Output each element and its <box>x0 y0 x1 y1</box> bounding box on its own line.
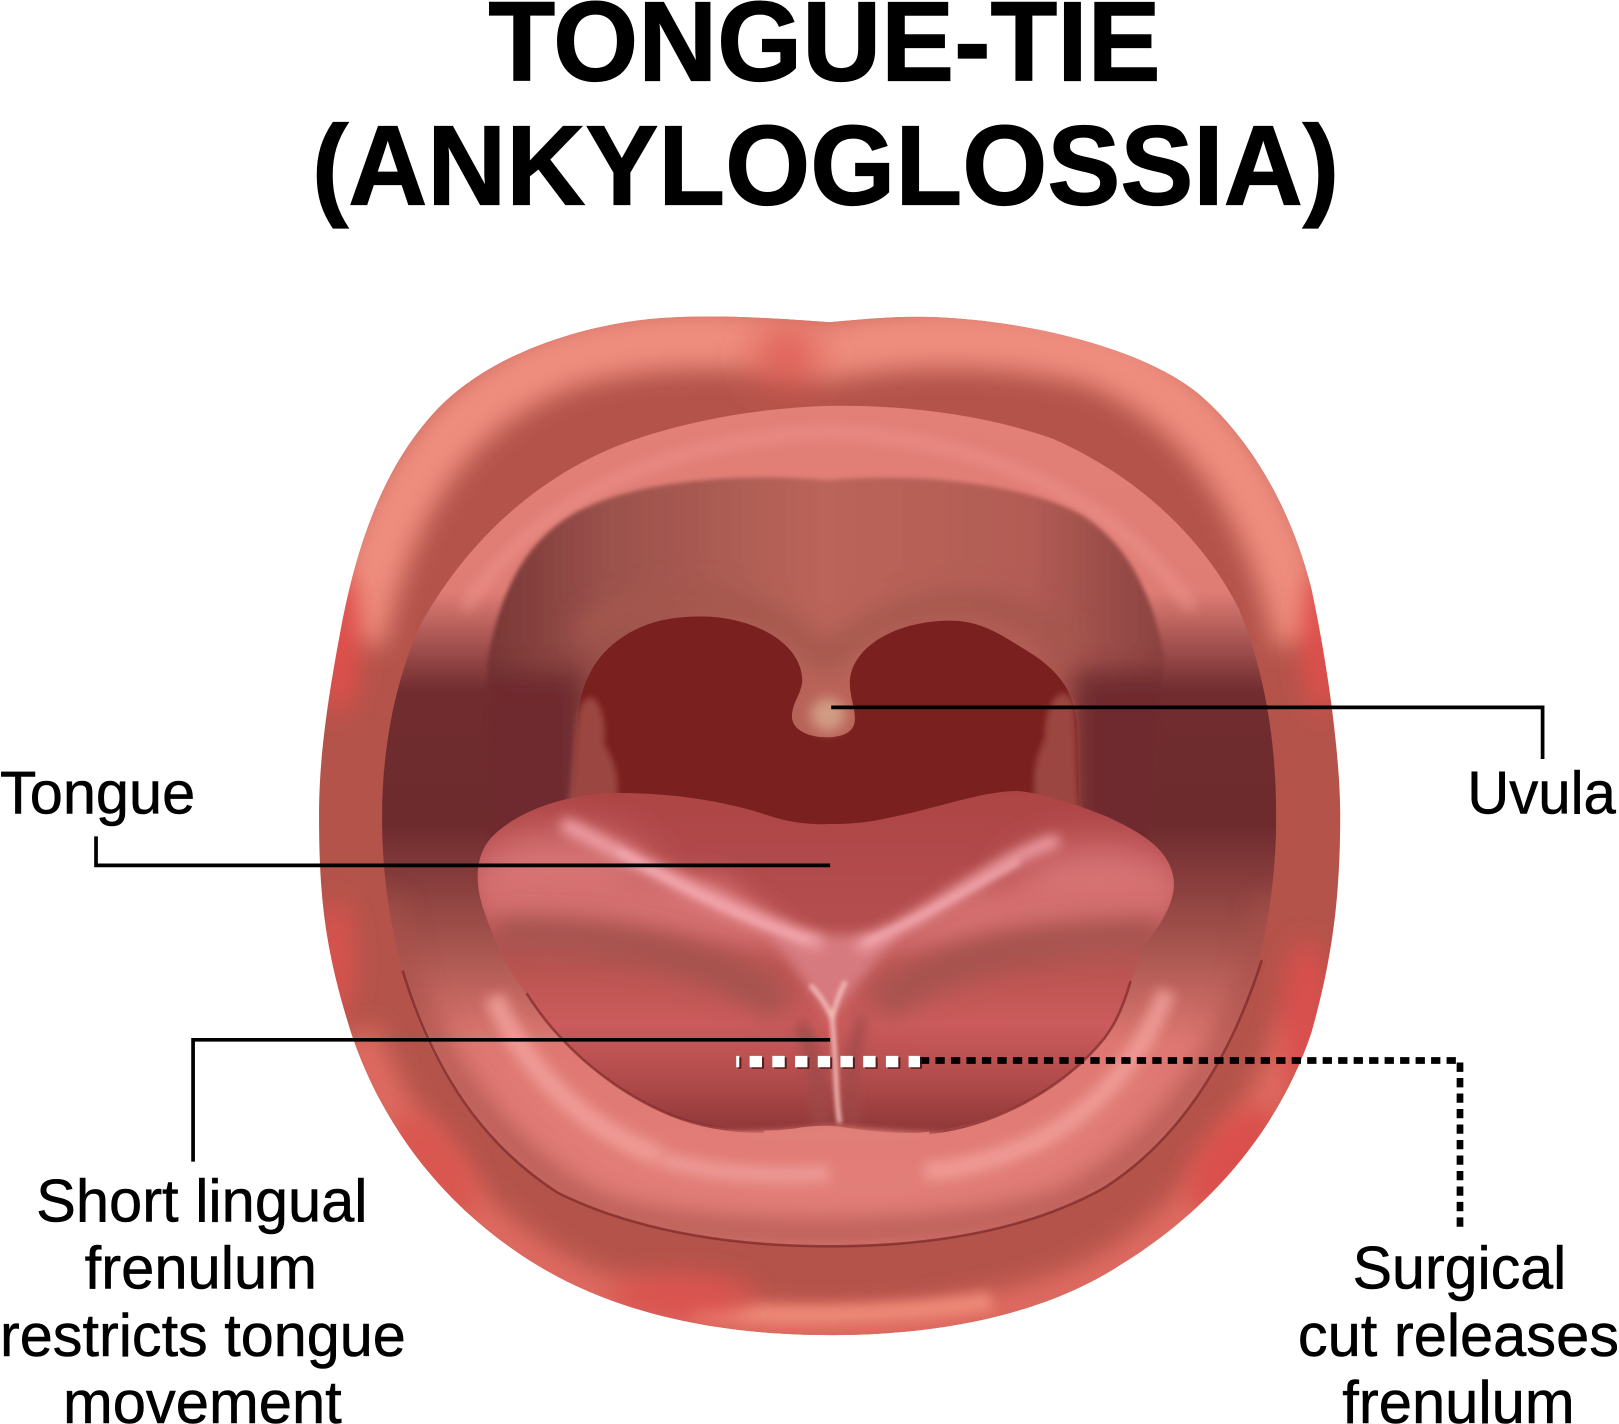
centre body <box>769 935 898 1017</box>
callout: short lingual frenulum: restricts tongue <box>0 1302 406 1369</box>
callout: short lingual frenulum: frenulum <box>85 1235 317 1302</box>
outer lips <box>316 317 1342 1335</box>
tongue side lobes <box>465 831 650 924</box>
frenulum <box>812 983 845 1121</box>
callout: surgical cut <box>736 1060 1619 1424</box>
underside shading <box>496 933 785 1007</box>
lower lip fold <box>712 1127 945 1143</box>
mouth cavity rim shadow <box>403 960 1262 1246</box>
callout: surgical cut: cut releases <box>1298 1302 1619 1369</box>
title <box>312 0 1339 230</box>
cut line over frenulum <box>736 1062 922 1063</box>
callout: short lingual frenulum <box>0 1040 830 1424</box>
throat opening <box>571 616 1080 842</box>
title: (ANKYLOGLOSSIA) <box>312 103 1339 230</box>
callout: surgical cut: Surgical <box>1353 1235 1566 1302</box>
callout: uvula <box>831 707 1617 827</box>
lower gum shading <box>387 898 1272 1233</box>
illustration: open mouth <box>316 317 1342 1335</box>
mouth cavity and gums <box>372 398 1291 1255</box>
callout: uvula: Uvula <box>1467 760 1617 827</box>
tonsils <box>566 693 1080 816</box>
callout: short lingual frenulum: Short lingual <box>36 1168 368 1235</box>
uvula <box>811 698 846 731</box>
callout: tongue: Tongue <box>0 760 195 827</box>
tongue <box>465 785 1187 1141</box>
callout: tongue <box>0 760 830 865</box>
soft palate <box>486 476 1164 808</box>
tongue lower edge <box>527 981 1131 1133</box>
ridges <box>568 826 816 942</box>
